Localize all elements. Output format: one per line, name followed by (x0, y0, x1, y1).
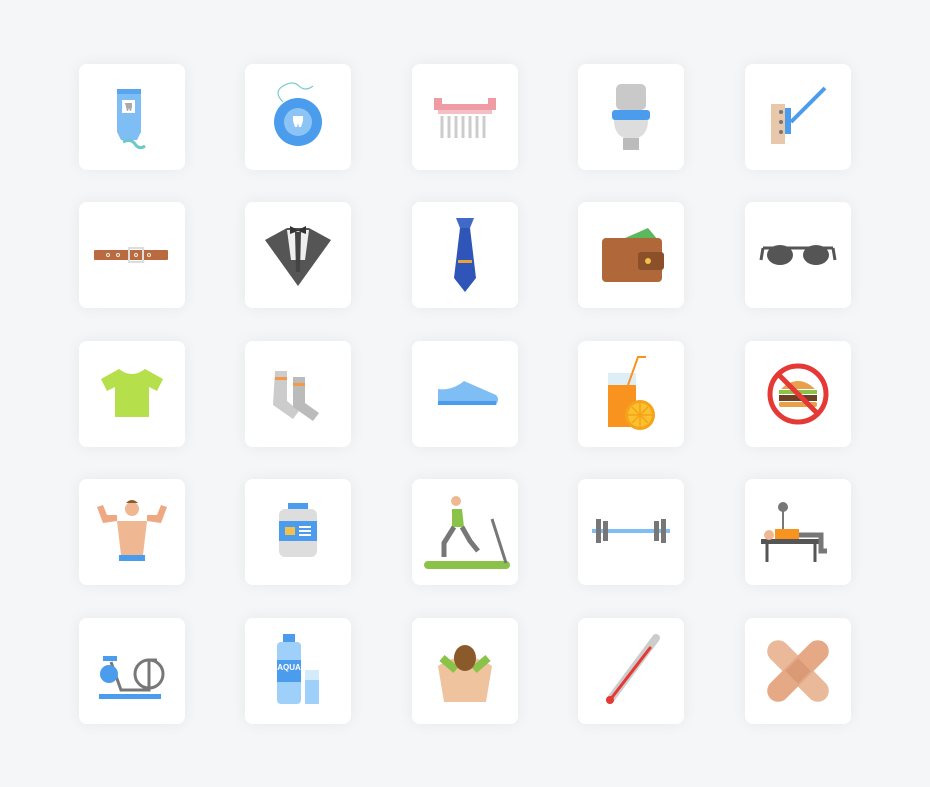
tile: belt (79, 202, 185, 308)
tile: juice (578, 341, 684, 447)
tile: sneaker (412, 341, 518, 447)
tile: treadmill (412, 479, 518, 585)
tile: no burger (745, 341, 851, 447)
tile: t-shirt (79, 341, 185, 447)
tile: dental floss (245, 64, 351, 170)
tile: massage (412, 618, 518, 724)
tile: bench press (745, 479, 851, 585)
tile: brush (412, 64, 518, 170)
tile: toilet (578, 64, 684, 170)
tile: razor (745, 64, 851, 170)
tile: toothpaste (79, 64, 185, 170)
tile: wallet (578, 202, 684, 308)
tile: tie (412, 202, 518, 308)
tile: thermometer (578, 618, 684, 724)
tile: muscle man (79, 479, 185, 585)
tile: tuxedo (245, 202, 351, 308)
tile: barbell (578, 479, 684, 585)
tile: exercise bike (79, 618, 185, 724)
tile: bandage (745, 618, 851, 724)
tile: water bottle: AQUA (277, 663, 301, 672)
tile: protein jar (245, 479, 351, 585)
tile: water bottle (245, 618, 351, 724)
tile: socks (245, 341, 351, 447)
tile: sunglasses (745, 202, 851, 308)
